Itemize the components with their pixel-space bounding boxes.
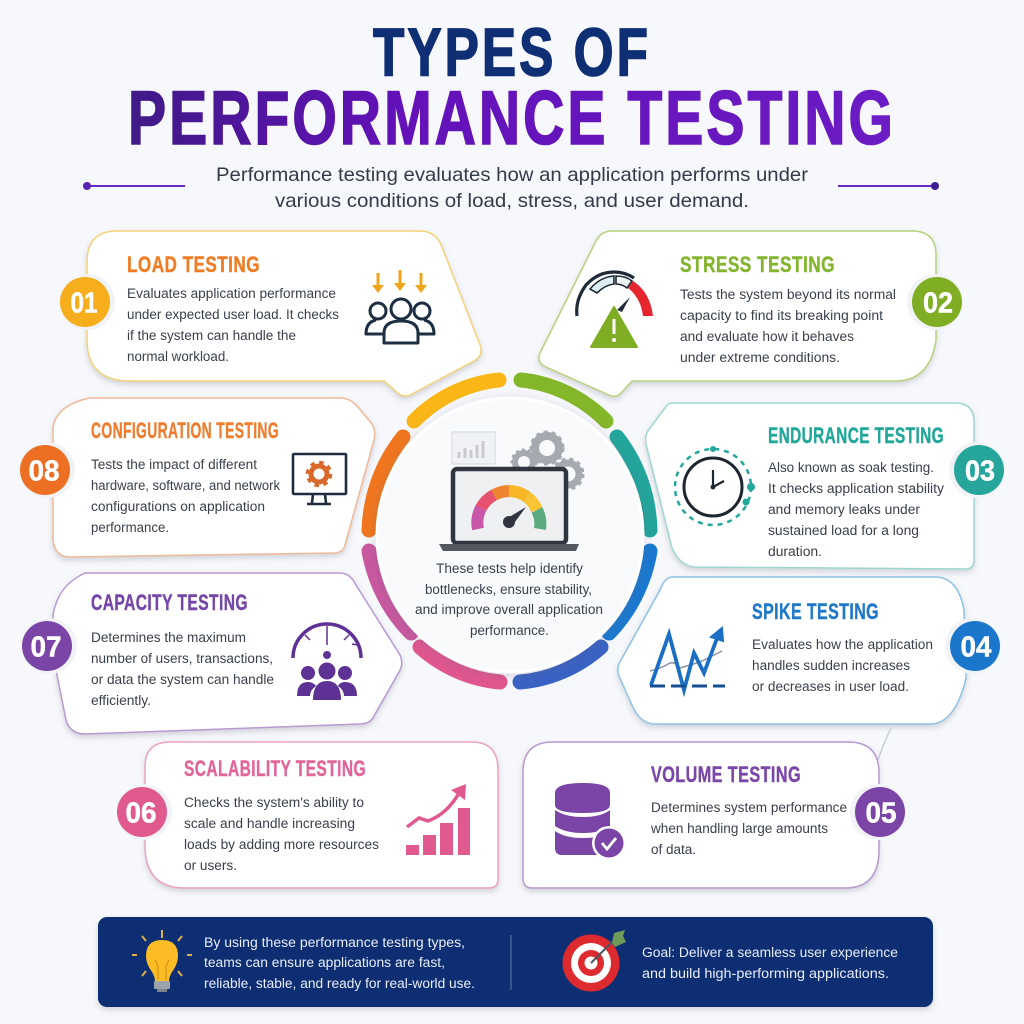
heading: SPIKE TESTING [752, 599, 879, 624]
panel: scalability testing [116, 742, 498, 888]
heading: ENDURANCE TESTING [768, 423, 944, 448]
description: normal workload. [127, 349, 229, 364]
heading: SCALABILITY TESTING [184, 756, 366, 781]
footer text right: and build high-performing applications. [642, 966, 889, 981]
number badge 02: 02 [923, 288, 953, 320]
description [91, 630, 274, 708]
number badge 07 [21, 618, 77, 674]
heading: VOLUME TESTING [651, 762, 801, 787]
icon: gauge warning [577, 272, 653, 347]
description: Evaluates how the application [752, 637, 933, 652]
description: hardware, software, and network [91, 478, 280, 493]
description [127, 286, 339, 364]
footer text left [204, 935, 475, 991]
subtitle [216, 164, 809, 212]
icon: users under load [366, 270, 434, 343]
description: under expected user load. It checks [127, 307, 339, 322]
description: performance. [91, 520, 169, 535]
description: and evaluate how it behaves [680, 329, 854, 344]
description: or data the system can handle [91, 672, 274, 687]
heading: STRESS TESTING [680, 252, 835, 277]
description [680, 287, 896, 365]
center ring [369, 380, 650, 682]
chart behind laptop [452, 432, 495, 464]
number badge 01 [59, 274, 115, 330]
footer text left: reliable, stable, and ready for real-world use. [204, 976, 475, 991]
footer text left: By using these performance testing types, [204, 935, 465, 950]
description: Evaluates application performance [127, 286, 336, 301]
description: of data. [651, 842, 696, 857]
number badge 05: 05 [866, 798, 896, 830]
center text: performance. [470, 623, 549, 638]
description: efficiently. [91, 693, 151, 708]
icon: growth bars [406, 784, 470, 855]
description: or users. [184, 858, 237, 873]
icon: clock [675, 446, 755, 525]
decorative line left [83, 182, 185, 190]
heading: CONFIGURATION TESTING [91, 418, 279, 443]
title [128, 14, 896, 161]
divider [510, 935, 512, 990]
number badge 06 [116, 784, 172, 840]
number badge 03: 03 [965, 456, 995, 488]
description: sustained load for a long [768, 523, 919, 538]
description: loads by adding more resources [184, 837, 379, 852]
panel: load testing [59, 231, 481, 396]
icon: monitor gear [293, 454, 346, 504]
panel: endurance testing [646, 403, 1005, 569]
icon: spike chart [650, 628, 725, 690]
description: duration. [768, 544, 822, 559]
panel: stress testing [539, 231, 963, 396]
icon: database check [555, 783, 626, 860]
description: or decreases in user load. [752, 679, 909, 694]
center disk [377, 398, 643, 672]
decorative line right [838, 182, 939, 190]
description [91, 457, 280, 535]
panel: spike testing [618, 577, 1001, 724]
icon: target [562, 930, 626, 992]
number badge 06: 06 [126, 798, 156, 830]
panel: configuration testing [19, 398, 375, 557]
description: capacity to find its breaking point [680, 308, 883, 323]
icon: laptop with gauge [439, 432, 583, 551]
footer text right [642, 945, 898, 981]
description: under extreme conditions. [680, 350, 840, 365]
description: handles sudden increases [752, 658, 910, 673]
footer banner [98, 917, 933, 1007]
description: It checks application stability [768, 481, 944, 496]
footer text left: teams can ensure applications are fast, [204, 955, 445, 970]
description [768, 460, 944, 559]
gears [512, 432, 583, 489]
description: number of users, transactions, [91, 651, 273, 666]
number badge 02 [907, 274, 963, 330]
footer text right: Goal: Deliver a seamless user experience [642, 945, 898, 960]
number badge 05 [850, 784, 906, 840]
description: Tests the system beyond its normal [680, 287, 896, 302]
center text [415, 561, 603, 638]
description: Checks the system's ability to [184, 795, 364, 810]
description: and memory leaks under [768, 502, 921, 517]
description: Also known as soak testing. [768, 460, 934, 475]
description: if the system can handle the [127, 328, 296, 343]
center text: and improve overall application [415, 602, 603, 617]
title: TYPES OF [373, 14, 651, 90]
description: scale and handle increasing [184, 816, 355, 831]
description: when handling large amounts [650, 821, 828, 836]
description [752, 637, 933, 694]
center text: These tests help identify [436, 561, 583, 576]
description: configurations on application [91, 499, 265, 514]
description: Tests the impact of different [91, 457, 257, 472]
panel: volume testing [523, 742, 906, 888]
number badge 03 [949, 442, 1005, 498]
number badge 07: 07 [30, 632, 62, 664]
center text: bottlenecks, ensure stability, [425, 582, 592, 597]
heading: CAPACITY TESTING [91, 590, 248, 615]
panel: capacity testing [21, 573, 402, 734]
description: Determines system performance [651, 800, 847, 815]
icon: light bulb [132, 930, 192, 992]
number badge 08 [19, 442, 75, 498]
number badge 04 [945, 618, 1001, 674]
description: Determines the maximum [91, 630, 246, 645]
number badge 04: 04 [960, 632, 992, 664]
heading: LOAD TESTING [127, 252, 260, 277]
number badge 01: 01 [70, 288, 98, 320]
subtitle: Performance testing evaluates how an application performs under [216, 164, 809, 186]
number badge 08: 08 [28, 456, 60, 488]
description [184, 795, 379, 873]
connector line [878, 728, 891, 760]
description [650, 800, 847, 857]
subtitle: various conditions of load, stress, and user demand. [275, 190, 749, 212]
icon: gauge and users [293, 624, 361, 700]
